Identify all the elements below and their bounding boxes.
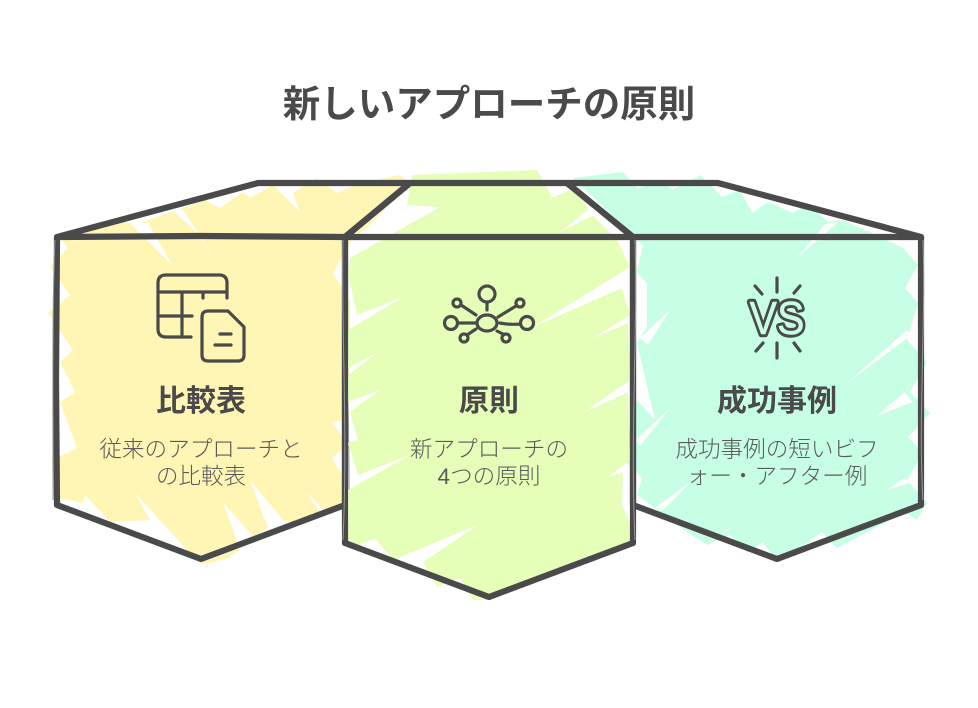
description: 比較表: 従来のアプローチと — [99, 437, 303, 462]
icon: table and document — [158, 275, 244, 361]
description: 成功事例 — [675, 437, 879, 489]
heading: 原則: 原則 — [459, 385, 519, 418]
description: 原則: 新アプローチの — [410, 437, 568, 462]
description: 原則: 4つの原則 — [438, 464, 540, 489]
heading: 成功事例: 成功事例 — [717, 385, 837, 418]
green outline — [345, 183, 633, 597]
yellow outline — [56, 183, 410, 559]
heading: 比較表: 比較表 — [156, 385, 246, 418]
description: 比較表: の比較表 — [156, 464, 246, 489]
green hachure fill — [348, 170, 630, 600]
description: 比較表 — [99, 437, 303, 489]
panel: 成功事例 — [567, 172, 930, 562]
panel: 原則 — [343, 170, 636, 600]
description: 原則 — [410, 437, 568, 489]
panel: 比較表 — [48, 175, 410, 565]
description: 成功事例: 成功事例の短いビフ — [675, 437, 879, 462]
description: 成功事例: ォー・アフター例 — [687, 464, 867, 489]
icon: VS burst: VS — [750, 292, 804, 344]
icon: network hub — [444, 286, 534, 342]
icon: VS burst — [750, 278, 804, 358]
mint hachure fill — [573, 172, 930, 562]
title: 新しいアプローチの原則 — [283, 83, 695, 125]
mint outline — [567, 183, 921, 559]
yellow hachure fill — [48, 175, 410, 565]
icon: VS burst: VS — [750, 292, 804, 344]
